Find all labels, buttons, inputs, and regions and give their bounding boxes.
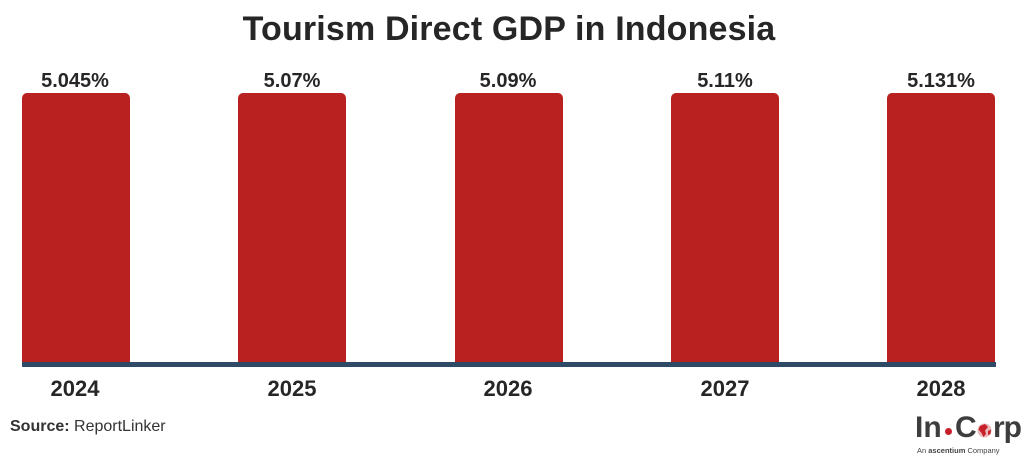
source note: Source: ReportLinker — [10, 418, 166, 435]
value label 2025: 5.07% — [264, 70, 320, 92]
bar 2028 — [887, 93, 995, 362]
year label 2027: 2027 — [701, 376, 749, 401]
logo wordmark: C: C — [955, 411, 977, 444]
year label 2026: 2026 — [484, 376, 532, 401]
year label 2028: 2028 — [917, 376, 965, 401]
logo wordmark: rp: rp — [993, 411, 1021, 444]
logo red dot — [945, 428, 952, 435]
logo tagline: An ascentium Company — [917, 446, 1000, 455]
year label 2024: 2024 — [51, 376, 99, 401]
axis baseline — [22, 362, 996, 367]
bar 2027 — [671, 93, 779, 362]
value label 2026: 5.09% — [480, 70, 536, 92]
icon: globe — [978, 424, 992, 438]
bar 2025 — [238, 93, 346, 362]
title: Tourism Direct GDP in Indonesia — [243, 10, 775, 48]
bar 2026 — [455, 93, 563, 362]
logo wordmark: In: In — [915, 411, 942, 444]
value label 2024: 5.045% — [41, 70, 109, 92]
bar 2024 — [22, 93, 130, 362]
value label 2028: 5.131% — [907, 70, 975, 92]
year label 2025: 2025 — [268, 376, 316, 401]
value label 2027: 5.11% — [697, 70, 753, 92]
